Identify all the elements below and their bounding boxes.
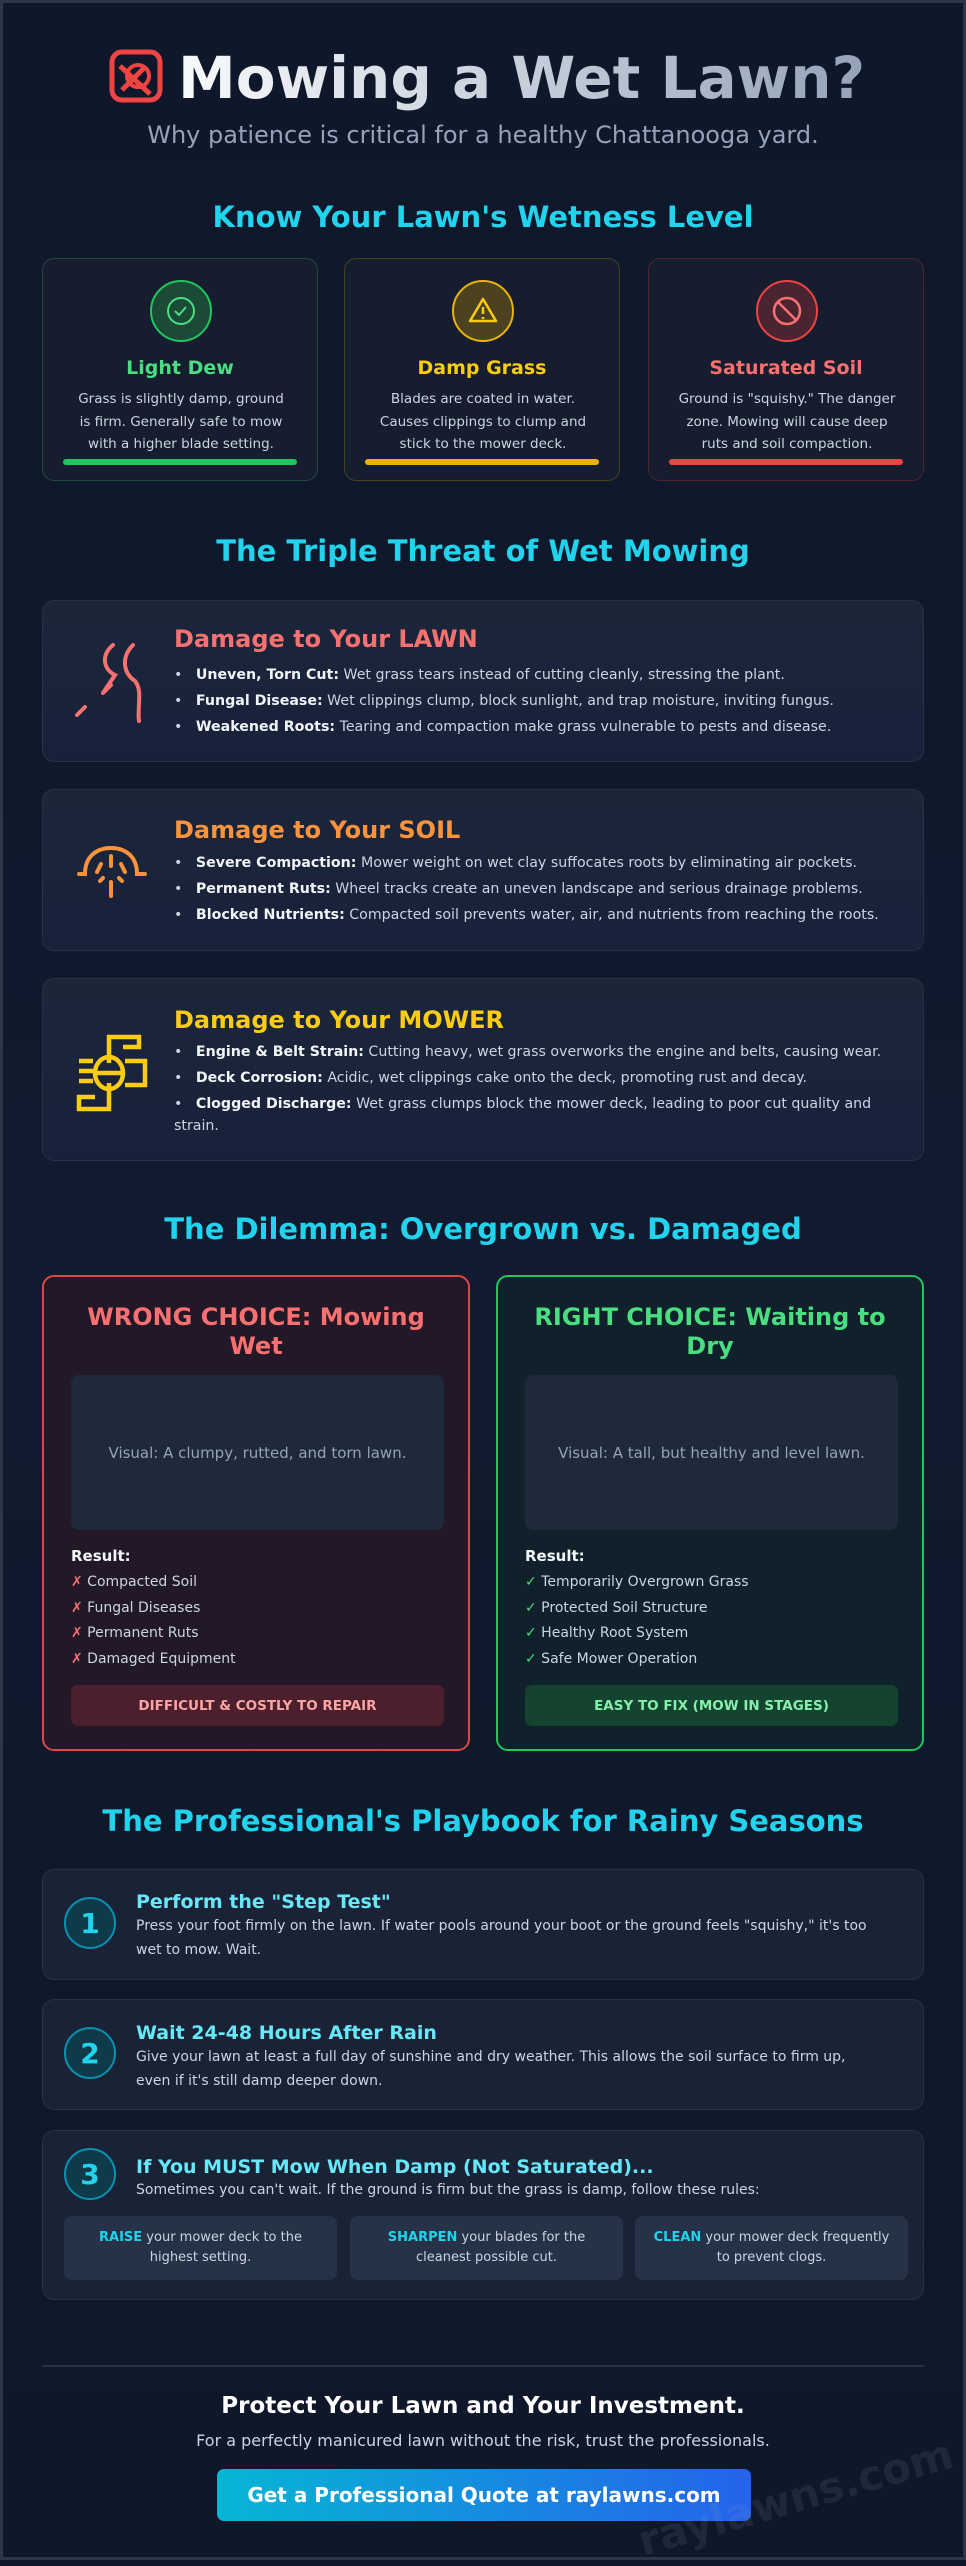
step 1: 1 [80,1906,100,1940]
panel: wrong choice [42,1275,470,1751]
step 2: Wait 24-48 Hours After Rain [136,2022,437,2044]
card: damp grass [344,258,620,481]
footer CTA [196,2393,770,2521]
subtitle: Why patience is critical for a healthy Chattanooga yard. [147,121,819,149]
rule: sharpen [350,2216,623,2280]
card: damp grass: Damp Grass [417,357,546,379]
panel: soil damage: Damage to Your SOIL [174,816,460,844]
card: saturated soil [648,258,924,481]
badge [525,1685,898,1726]
panel: wrong choice: Result: [71,1547,131,1565]
card: saturated soil: Saturated Soil [709,357,863,379]
rule: raise: highest setting. [150,2250,251,2265]
visual placeholder [71,1375,444,1530]
card: light dew: is firm. Generally safe to mow [80,414,282,430]
rule: raise: RAISE your mower deck to the [99,2230,302,2245]
step 2: 2 [80,2036,100,2070]
watermark: raylawns.com [633,2429,959,2566]
step 3: Sometimes you can't wait. If the ground is firm but the grass is damp, follow these rules: [136,2182,760,2198]
panel: mower damage: • Engine & Belt Strain: Cutting heavy, wet grass overworks the engine and belts, causing wear. [174,1044,881,1060]
panel: mower damage: Damage to Your MOWER [174,1006,504,1034]
panel: lawn damage: • Weakened Roots: Tearing and compaction make grass vulnerable to pests and disease. [174,719,831,735]
card: light dew [42,258,318,481]
panel: right choice: RIGHT CHOICE: Waiting to Dry [534,1303,886,1360]
visual placeholder [525,1375,898,1530]
panel: wrong choice: ✗ Damaged Equipment [71,1651,236,1667]
heading: wetness level: Know Your Lawn's Wetness Level [212,200,754,234]
panel: lawn damage: • Uneven, Torn Cut: Wet grass tears instead of cutting cleanly, stressing the plant. [174,667,785,683]
header [110,44,865,149]
title: Mowing a Wet Lawn? [178,44,865,112]
card: damp grass: Blades are coated in water. Causes clippings to clump and stick to the mower deck. [380,391,586,452]
button [217,2469,751,2521]
panel: mower damage: • Clogged Discharge: Wet grass clumps block the mower deck, leading to poor cut quality and [174,1096,871,1112]
panel: right choice: ✓ Temporarily Overgrown Grass [525,1574,749,1590]
rule: clean: CLEAN your mower deck frequently [654,2230,889,2245]
panel: soil damage [42,789,924,951]
heading: playbook: The Professional's Playbook for Rainy Seasons [102,1804,864,1838]
badge: DIFFICULT & COSTLY TO REPAIR [138,1698,377,1714]
heading: triple threat: The Triple Threat of Wet Mowing [216,534,750,568]
visual placeholder: Visual: A tall, but healthy and level lawn. [558,1444,865,1462]
step 2 [42,1999,924,2110]
heading: dilemma: The Dilemma: Overgrown vs. Damaged [164,1212,802,1246]
icon: warning [452,280,514,342]
panel: right choice: Result: [525,1547,585,1565]
rule: clean: to prevent clogs. [717,2250,826,2265]
panel: wrong choice: ✗ Permanent Ruts [71,1625,199,1641]
panel: soil damage: • Severe Compaction: Mower weight on wet clay suffocates roots by eliminating air pockets. [174,855,857,871]
step 2: Give your lawn at least a full day of sunshine and dry weather. This allows the soil surface to firm up, [136,2049,846,2065]
step 1: Press your foot firmly on the lawn. If water pools around your boot or the ground feels "squishy," it's too [136,1918,867,1934]
panel: wrong choice: ✗ Fungal Diseases [71,1600,200,1616]
panel: lawn damage [42,600,924,762]
panel: mower damage [42,978,924,1161]
icon: prohibited [756,280,818,342]
panel: right choice: ✓ Protected Soil Structure [525,1600,707,1616]
card: light dew: Light Dew [126,357,234,379]
card: light dew: Grass is slightly damp, ground [78,391,284,407]
panel: right choice: ✓ Healthy Root System [525,1625,688,1641]
step 1 [42,1869,924,1980]
step 1: Perform the "Step Test" [136,1891,391,1913]
step 3 [42,2130,924,2300]
footer CTA: Protect Your Lawn and Your Investment. [221,2393,745,2419]
panel: lawn damage: Damage to Your LAWN [174,625,478,653]
badge: EASY TO FIX (MOW IN STAGES) [594,1698,829,1714]
rule: raise [64,2216,337,2280]
visual placeholder: Visual: A clumpy, rutted, and torn lawn. [109,1444,406,1462]
footer CTA: For a perfectly manicured lawn without the risk, trust the professionals. [196,2431,770,2450]
panel: wrong choice: ✗ Compacted Soil [71,1574,197,1590]
rule: clean [635,2216,908,2280]
badge [71,1685,444,1726]
panel: right choice: ✓ Safe Mower Operation [525,1651,697,1667]
button: Get a Professional Quote at raylawns.com [247,2483,721,2507]
panel: mower damage: • Deck Corrosion: Acidic, wet clippings cake onto the deck, promoting rust and decay. [174,1070,807,1086]
rule: sharpen: SHARPEN your blades for the [388,2230,585,2245]
panel: lawn damage: • Fungal Disease: Wet clippings clump, block sunlight, and trap moisture, inviting fungus. [174,693,834,709]
panel: soil damage: • Blocked Nutrients: Compacted soil prevents water, air, and nutrients from reaching the roots. [174,907,879,923]
panel: right choice [496,1275,924,1751]
icon: no mowing [110,50,162,102]
card: saturated soil: Ground is "squishy." The danger zone. Mowing will cause deep ruts and soil compaction. [679,391,895,452]
rule: sharpen: cleanest possible cut. [416,2250,557,2265]
icon: mower engine [76,1034,148,1112]
step 2: even if it's still damp deeper down. [136,2072,382,2088]
panel: soil damage: • Permanent Ruts: Wheel tracks create an uneven landscape and serious drainage problems. [174,881,863,897]
panel: mower damage: strain. [174,1118,219,1134]
panel: wrong choice: WRONG CHOICE: Mowing Wet [87,1303,425,1360]
icon: soil [77,846,147,898]
icon: check [150,280,212,342]
step 1: wet to mow. Wait. [136,1942,261,1958]
step 3: If You MUST Mow When Damp (Not Saturated)... [136,2156,654,2178]
step 3: 3 [80,2158,100,2190]
card: light dew: with a higher blade setting. [88,436,274,452]
icon: torn grass [74,642,142,723]
